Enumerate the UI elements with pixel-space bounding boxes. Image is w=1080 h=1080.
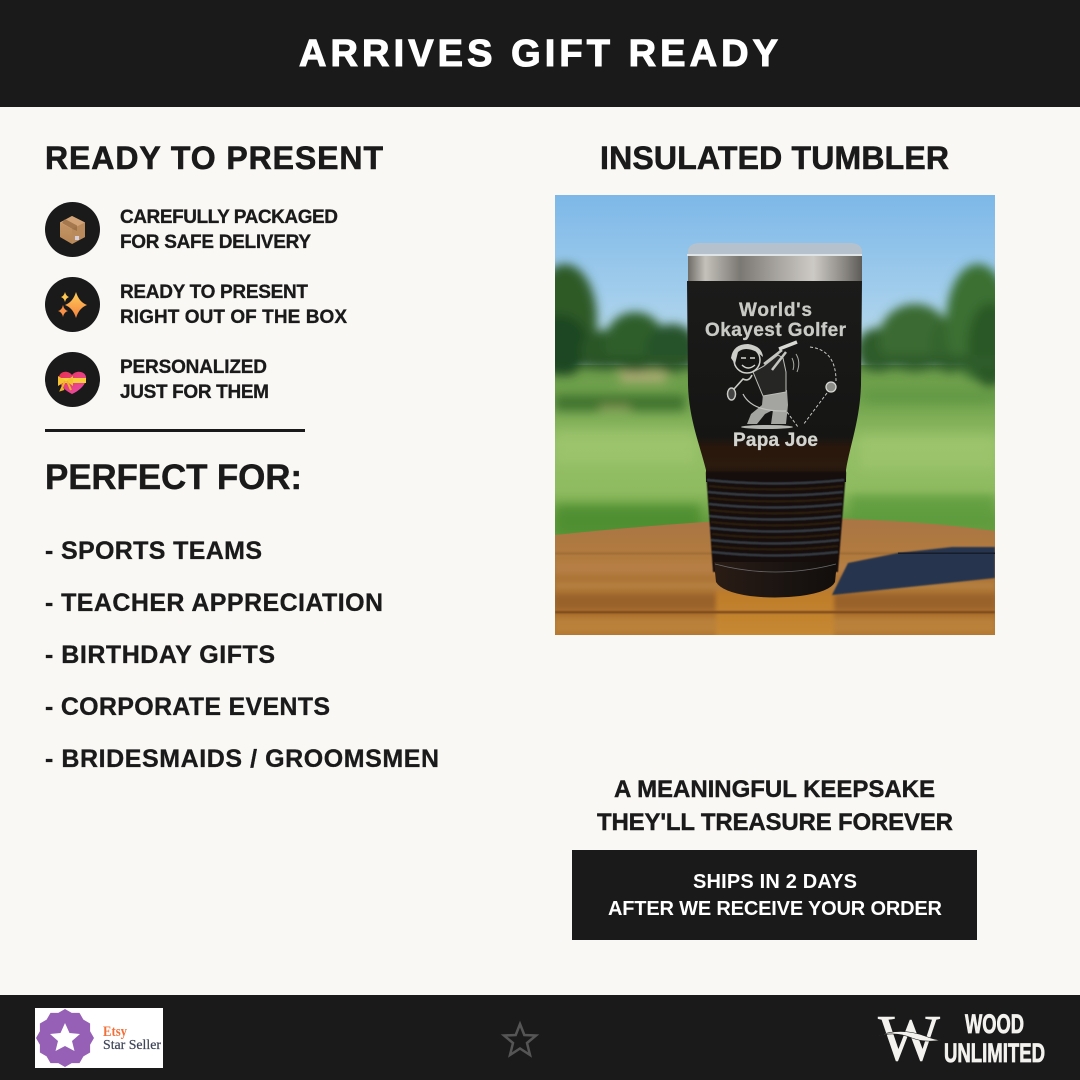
tumbler body [687, 281, 862, 482]
icon: package [45, 202, 100, 257]
product photo: tumbler on golf course [532, 195, 1012, 640]
list: occasions: - TEACHER APPRECIATION [45, 589, 383, 617]
engraving: golfer cartoon [728, 342, 836, 429]
logo: wood unlimited: WOOD [965, 1009, 1024, 1039]
logo: wood unlimited: W [878, 1002, 941, 1075]
heading: insulated tumbler: INSULATED TUMBLER [600, 140, 949, 176]
tumbler lid [688, 243, 862, 254]
text: personalized just for them: PERSONALIZED [120, 357, 267, 378]
engraving: papa joe: Papa Joe [733, 430, 818, 451]
text: carefully packaged [120, 207, 338, 253]
badge: etsy star seller [35, 1008, 163, 1068]
panel: perfect for [45, 458, 439, 773]
shadow [832, 547, 995, 595]
panel: ready to present [45, 140, 383, 407]
tagline: meaningful keepsake: A MEANINGFUL KEEPSAKE [614, 776, 935, 803]
tumbler steel band [688, 256, 862, 281]
tumbler ribs [706, 472, 846, 572]
head [734, 347, 760, 373]
callout: shipping: AFTER WE RECEIVE YOUR ORDER [608, 898, 943, 920]
badge: etsy star seller: Etsy [103, 1024, 128, 1040]
list: occasions: - BIRTHDAY GIFTS [45, 641, 275, 669]
engraving: world's okayest golfer: Okayest Golfer [705, 320, 847, 341]
text: carefully packaged: CAREFULLY PACKAGED [120, 207, 338, 228]
text: ready to present right out of the box: RIGHT OUT OF THE BOX [120, 307, 347, 328]
list: occasions: - SPORTS TEAMS [45, 537, 262, 565]
club head and shaft [734, 375, 752, 389]
icon: sparkles [45, 277, 100, 332]
arms and club [764, 350, 786, 370]
list: occasions [45, 537, 439, 773]
badge: etsy star seller: Star Seller [103, 1037, 162, 1052]
engraving: world's okayest golfer: World's [739, 300, 812, 321]
text: personalized just for them [120, 357, 269, 403]
torso [753, 355, 786, 396]
list: occasions: - CORPORATE EVENTS [45, 693, 330, 721]
tagline: meaningful keepsake: THEY'LL TREASURE FOREVER [597, 809, 953, 836]
callout: shipping [572, 850, 977, 940]
icon: star outline [504, 1024, 536, 1055]
heading: perfect for: PERFECT FOR: [45, 458, 302, 497]
pants [747, 390, 788, 424]
title: ARRIVES GIFT READY [299, 33, 778, 75]
tumbler [687, 243, 862, 598]
icon: gift heart [45, 352, 100, 407]
footer bar [0, 995, 1080, 1080]
list: occasions: - BRIDESMAIDS / GROOMSMEN [45, 745, 439, 773]
tumbler base [714, 562, 837, 598]
heading: ready to present: READY TO PRESENT [45, 140, 383, 176]
table top [555, 518, 995, 635]
engraving: world's okayest golfer [705, 300, 847, 341]
text: ready to present right out of the box: READY TO PRESENT [120, 282, 308, 303]
header banner [0, 0, 1080, 107]
logo: wood unlimited [878, 1002, 1045, 1075]
tagline: meaningful keepsake [597, 776, 953, 836]
callout: shipping: SHIPS IN 2 DAYS [693, 871, 857, 893]
text: carefully packaged: FOR SAFE DELIVERY [120, 232, 311, 253]
swing path [743, 394, 786, 411]
text: ready to present right out of the box [120, 282, 347, 328]
text: personalized just for them: JUST FOR THEM [120, 382, 269, 403]
